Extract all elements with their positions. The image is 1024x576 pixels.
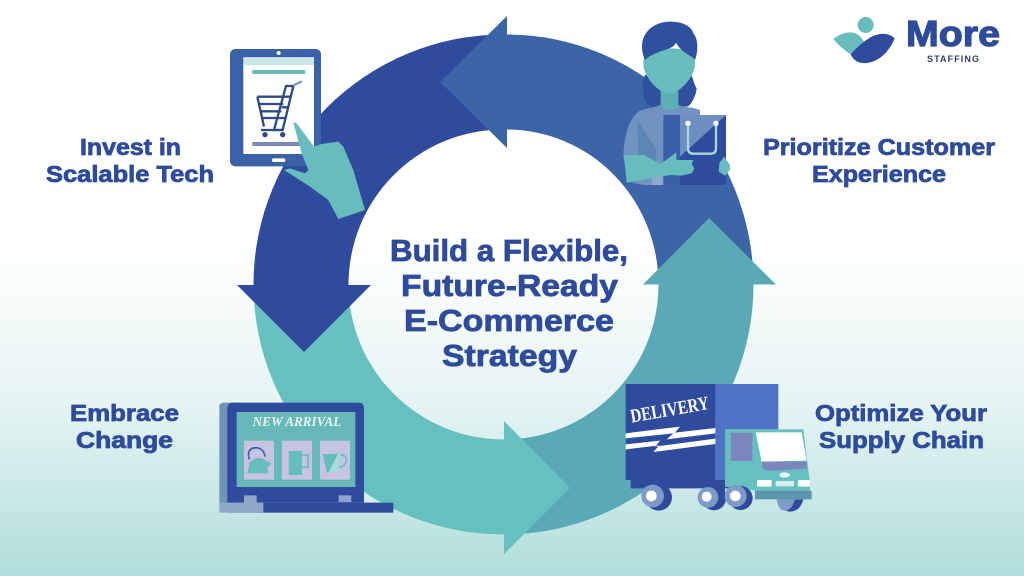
logo wordmark: More	[906, 13, 1000, 54]
arrow: supply chain segment	[504, 218, 776, 534]
label: prioritize customer experience: Prioritize Customer	[763, 134, 995, 160]
label: invest in scalable tech	[46, 134, 214, 187]
label: optimize your supply chain: Optimize Your	[815, 400, 987, 426]
icon: tablet with cart and hand	[230, 49, 365, 219]
label: embrace change: Change	[76, 427, 173, 453]
title: Strategy	[442, 338, 578, 373]
logo: More Staffing	[833, 13, 1000, 64]
label: invest in scalable tech: Scalable Tech	[46, 161, 214, 187]
label: prioritize customer experience	[763, 134, 995, 187]
title: Build a Flexible,	[390, 233, 628, 268]
label: invest in scalable tech: Invest in	[80, 134, 181, 160]
title: Future-Ready	[401, 268, 619, 303]
icon: laptop with new arrivals: NEW ARRIVAL	[252, 415, 341, 430]
label: optimize your supply chain	[815, 400, 987, 453]
arc: invest in tech segment	[254, 34, 504, 284]
label: embrace change	[70, 400, 179, 453]
cycle diagram	[237, 16, 776, 554]
arrow: embrace change segment	[254, 284, 570, 554]
label: optimize your supply chain: Supply Chain	[819, 427, 984, 453]
icon: customer with shopping bag	[623, 22, 730, 185]
logo tagline: STAFFING	[927, 54, 979, 64]
label: prioritize customer experience: Experience	[812, 161, 946, 187]
arrow: customer experience segment	[440, 16, 754, 284]
label: embrace change: Embrace	[70, 400, 179, 426]
arrowhead: invest in tech pointing down	[237, 282, 371, 352]
title: E-Commerce	[404, 303, 614, 338]
title	[390, 233, 628, 373]
icon: delivery truck: DELIVERY	[629, 393, 711, 428]
icon: laptop with new arrivals	[219, 403, 393, 513]
icon: delivery truck	[626, 384, 812, 512]
logo mark	[833, 17, 895, 63]
